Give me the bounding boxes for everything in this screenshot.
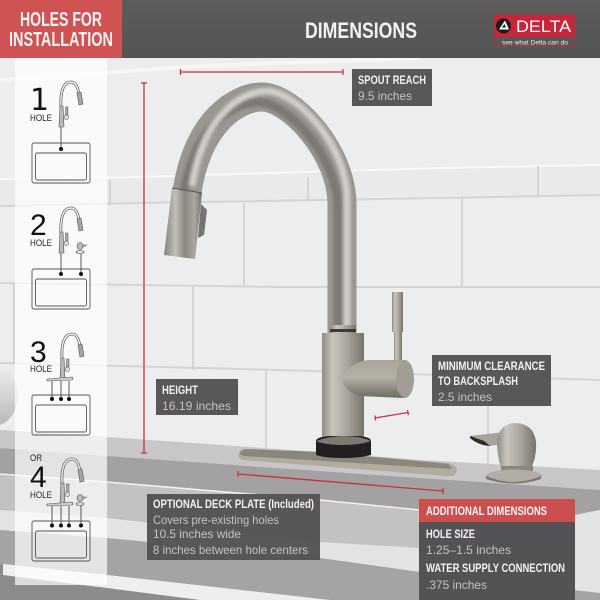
panel: additional dimensions: ADDITIONAL DIMENSIONS [426, 504, 547, 518]
icon group: or 4 hole: 4 [30, 461, 47, 494]
panel: additional dimensions [419, 499, 575, 600]
faucet body [330, 325, 356, 335]
deck plate [238, 449, 457, 476]
title: DIMENSIONS [305, 18, 417, 43]
callout: minimum clearance [432, 355, 551, 406]
logo: Delta: DELTA [516, 18, 571, 36]
logo: Delta [494, 15, 575, 46]
arrow: spout reach [180, 69, 343, 75]
counter top surface [0, 430, 600, 490]
callout: optional deck plate: 10.5 inches wide [153, 527, 241, 541]
icon group: 2 hole: 2 [30, 209, 47, 242]
heading: holes for installation: HOLES FOR [20, 9, 102, 31]
icon group: 3 hole: 3 [30, 336, 47, 369]
lever handle [342, 360, 414, 398]
faucet photo [164, 91, 457, 476]
logo: Delta: see what Delta can do [502, 40, 568, 46]
icon group: 1 hole: HOLE [30, 113, 52, 123]
callout: spout reach: 9.5 inches [358, 89, 412, 103]
panel: translucent hole column [15, 58, 107, 585]
panel: additional dimensions: .375 inches [426, 578, 487, 592]
spout [183, 91, 347, 343]
callout: optional deck plate: 8 inches between hole centers [153, 543, 308, 557]
header: gray bar [122, 0, 600, 58]
base ring [316, 436, 371, 458]
icon group: 1 hole [30, 82, 90, 183]
mid grey band [0, 474, 575, 548]
callout: height: 16.19 inches [162, 399, 231, 413]
handle stem [392, 292, 403, 332]
callout: minimum clearance: MINIMUM CLEARANCE [438, 359, 545, 373]
heading: holes for installation [9, 9, 113, 51]
soap dispenser [470, 423, 542, 484]
spray button [198, 204, 207, 238]
lower speckled band [0, 530, 600, 600]
bright light band [0, 510, 600, 593]
arrow: height [141, 83, 147, 453]
callout: optional deck plate: Covers pre-existing holes [153, 513, 279, 527]
callout: optional deck plate [147, 494, 320, 560]
heading: holes for installation: INSTALLATION [9, 29, 113, 51]
icon group: 2 hole [30, 208, 90, 309]
panel: additional dimensions: 1.25–1.5 inches [426, 543, 511, 557]
callout: height: HEIGHT [162, 383, 199, 397]
panel: additional dimensions: HOLE SIZE [426, 527, 475, 541]
callout: spout reach: SPOUT REACH [358, 73, 426, 87]
pull-down head [164, 188, 202, 259]
panel: additional dimensions: WATER SUPPLY CONNECTION [426, 561, 565, 575]
icon group: 3 hole: HOLE [30, 364, 52, 374]
header: red tab [0, 0, 122, 58]
arrow: deck plate width [238, 471, 443, 494]
callout: optional deck plate: OPTIONAL DECK PLATE (Included) [153, 497, 314, 511]
callout: height [156, 379, 238, 415]
icon group: or 4 hole: OR [30, 453, 42, 463]
icon group: 2 hole: HOLE [30, 238, 52, 248]
callout: minimum clearance: TO BACKSPLASH [438, 374, 518, 388]
icon group: 3 hole [30, 334, 90, 435]
icon group: or 4 hole: HOLE [30, 490, 52, 500]
icon group: or 4 hole [30, 453, 90, 561]
arrow: minimum clearance [375, 410, 408, 420]
callout: spout reach [352, 69, 432, 106]
icon group: 1 hole: 1 [30, 83, 49, 118]
callout: minimum clearance: 2.5 inches [438, 390, 492, 404]
counter speckled front face [0, 448, 600, 515]
